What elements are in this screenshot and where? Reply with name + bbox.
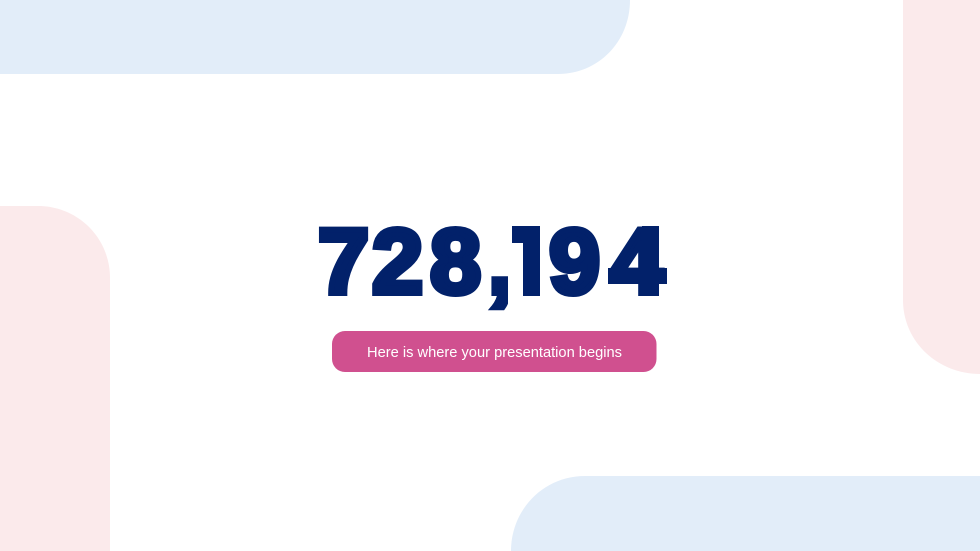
subtitle text: Here is where your presentation begins: [367, 344, 622, 361]
pill background: [332, 331, 656, 372]
title: big number: 728,194: [318, 211, 662, 313]
panel: top-left blue rounded shape: [0, 0, 630, 74]
callout: pink pill with subtitle: [332, 331, 656, 372]
panel: top-right pink rounded shape: [903, 0, 980, 374]
panel: left pink rounded shape: [0, 206, 110, 551]
panel: bottom-right blue rounded shape: [511, 476, 980, 551]
